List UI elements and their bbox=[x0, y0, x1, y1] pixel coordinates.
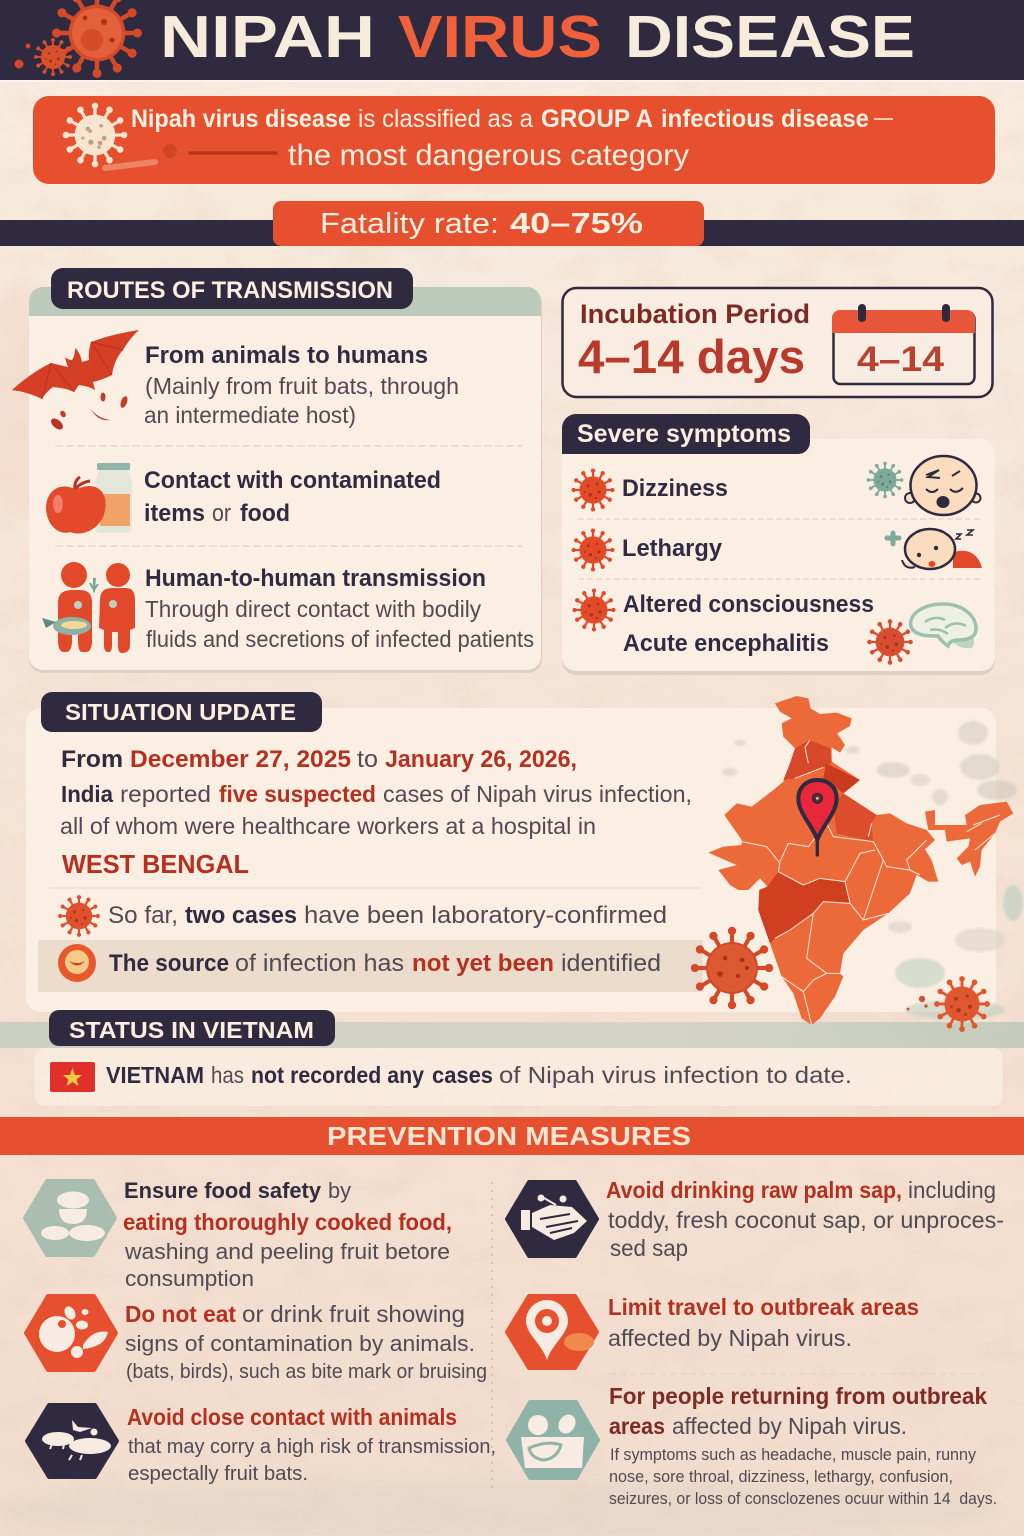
lab confirmed line: have been laboratory-confirmed bbox=[304, 902, 667, 929]
text: seizures, or loss of consclozenes ocuur within 14 days. bbox=[609, 1489, 997, 1508]
fatality band: 40–75% bbox=[510, 208, 643, 240]
panel: incubation period: Incubation Period bbox=[580, 299, 810, 329]
panel: situation update bbox=[26, 692, 1023, 1020]
header bar bbox=[0, 0, 1024, 82]
source unknown line bbox=[38, 940, 703, 992]
prevention: contaminated fruit bbox=[26, 1296, 487, 1383]
icon: small virus bbox=[14, 38, 72, 76]
situation text: all of whom were healthcare workers at a hospital in bbox=[60, 813, 596, 839]
text bbox=[606, 1177, 1004, 1261]
icon: sleeping face bbox=[887, 529, 982, 569]
banner text: the most dangerous category bbox=[288, 139, 689, 172]
text: For people returning from outbreak bbox=[609, 1383, 987, 1409]
prevention: returning travellers bbox=[508, 1383, 997, 1508]
text: (bats, birds), such as bite mark or bruising bbox=[126, 1361, 487, 1383]
text: consumption bbox=[125, 1266, 254, 1291]
icon: hexagon people bbox=[508, 1402, 598, 1478]
banner text bbox=[131, 105, 893, 172]
panel: routes of transmission bbox=[12, 268, 542, 673]
text: Avoid drinking raw palm sap, bbox=[606, 1177, 902, 1203]
Vietnam text: not recorded any bbox=[251, 1062, 424, 1088]
heading: ROUTES OF TRANSMISSION bbox=[67, 277, 393, 304]
prevention heading band: PREVENTION MEASURES bbox=[327, 1121, 691, 1151]
text: from animals: From animals to humans bbox=[145, 342, 428, 369]
icon: apple and jar bbox=[46, 463, 132, 533]
decorative smear bbox=[105, 144, 276, 168]
icon: dizzy face bbox=[867, 456, 980, 515]
text: sed sap bbox=[610, 1235, 688, 1261]
situation text: cases of Nipah virus infection, bbox=[383, 781, 692, 807]
banner text: GROUP A bbox=[541, 105, 653, 133]
map: India bbox=[708, 696, 1013, 1025]
situation text: December 27, 2025 bbox=[130, 746, 351, 773]
icon: hexagon animals bbox=[27, 1405, 117, 1477]
prevention heading band bbox=[0, 1117, 1024, 1155]
watercolor blotches bbox=[722, 721, 1023, 1020]
text: affected by Nipah virus. bbox=[608, 1325, 852, 1351]
text: human to human: fluids and secretions of infected patients bbox=[146, 626, 534, 652]
text: eating thoroughly cooked food, bbox=[123, 1209, 452, 1235]
prevention: palm sap bbox=[507, 1177, 1004, 1261]
text bbox=[127, 1404, 496, 1485]
text: signs of contamination by animals. bbox=[125, 1331, 475, 1356]
panel: incubation period: 4–14 days bbox=[578, 330, 805, 383]
text: areas bbox=[609, 1413, 665, 1439]
prevention: animals bbox=[27, 1404, 496, 1485]
text: contact: items bbox=[144, 500, 205, 527]
text: Limit travel to outbreak areas bbox=[608, 1294, 919, 1320]
Vietnam text bbox=[106, 1062, 852, 1088]
title bbox=[160, 4, 915, 70]
icon: hexagon chef bbox=[25, 1181, 115, 1255]
text bbox=[123, 1178, 452, 1291]
icon: Vietnam flag bbox=[50, 1062, 95, 1092]
banner text: infectious disease bbox=[661, 105, 869, 133]
text: contact bbox=[144, 467, 441, 527]
symptom labels: Acute encephalitis bbox=[623, 630, 829, 657]
situation text: India bbox=[61, 781, 113, 807]
title: NIPAH bbox=[160, 4, 375, 70]
heading: SITUATION UPDATE bbox=[65, 699, 296, 725]
text bbox=[125, 1301, 487, 1383]
heading bbox=[49, 1010, 335, 1046]
fatality band bbox=[0, 201, 1024, 246]
text: human to human: Through direct contact with bodily bbox=[145, 596, 481, 622]
text: from animals: an intermediate host) bbox=[144, 402, 356, 428]
text: Avoid close contact with animals bbox=[127, 1404, 457, 1430]
icon: calendar: 4–14 bbox=[857, 340, 945, 379]
symptom labels bbox=[622, 475, 874, 657]
text: human to human: Human-to-human transmission bbox=[145, 565, 486, 592]
source unknown line: identified bbox=[561, 950, 661, 977]
title: DISEASE bbox=[625, 4, 915, 70]
heading: Severe symptoms bbox=[577, 420, 791, 448]
text: contact: food bbox=[240, 500, 290, 527]
text bbox=[609, 1383, 997, 1508]
icon: calendar bbox=[832, 304, 975, 384]
text: toddy, fresh coconut sap, or unproces- bbox=[608, 1207, 1004, 1233]
icon: bat bbox=[12, 330, 139, 432]
icon: large virus bbox=[52, 0, 142, 78]
northeast states bbox=[925, 802, 1013, 877]
banner: classification bbox=[33, 96, 995, 184]
symptom labels: Lethargy bbox=[622, 535, 723, 562]
text: Ensure food safety bbox=[124, 1178, 322, 1203]
icon: location pin bbox=[798, 780, 837, 855]
icon: hexagon hands bbox=[507, 1182, 597, 1256]
source unknown line: of infection has bbox=[235, 950, 404, 977]
icon: large virus near map bbox=[691, 927, 773, 1009]
text: affected by Nipah virus. bbox=[672, 1413, 907, 1439]
heading bbox=[41, 692, 322, 732]
Vietnam text: of Nipah virus infection to date. bbox=[499, 1062, 852, 1088]
icon: two people bbox=[42, 562, 135, 653]
banner text: is classified as a bbox=[358, 105, 533, 133]
icon: virus bullets bbox=[571, 468, 616, 632]
text: contact: Contact with contaminated bbox=[144, 467, 441, 494]
text: Do not eat bbox=[125, 1301, 236, 1327]
prevention: limit travel bbox=[507, 1294, 919, 1368]
source unknown line: The source bbox=[109, 950, 229, 977]
text: If symptoms such as headache, muscle pain, runny bbox=[610, 1445, 976, 1464]
situation text: five suspected bbox=[219, 781, 376, 807]
band: status strip bbox=[0, 1022, 1024, 1048]
text: nose, sore throal, dizziness, lethargy, confusion, bbox=[609, 1467, 953, 1486]
text: human to human bbox=[145, 565, 534, 652]
icon: brain and virus bbox=[867, 604, 976, 665]
Vietnam text: has bbox=[211, 1062, 244, 1088]
heading bbox=[51, 268, 413, 309]
situation text: January 26, 2026, bbox=[385, 746, 577, 773]
text bbox=[608, 1294, 919, 1351]
banner text: Nipah virus disease bbox=[131, 105, 351, 133]
heading bbox=[562, 414, 810, 454]
icon: small virus near map bbox=[907, 976, 990, 1032]
source unknown line: not yet been bbox=[412, 950, 554, 977]
panel: status in Vietnam bbox=[35, 1010, 1003, 1106]
panel: incubation period bbox=[562, 288, 992, 397]
situation text: From bbox=[61, 746, 123, 773]
text: espectally fruit bats. bbox=[128, 1463, 308, 1485]
text: including bbox=[908, 1177, 996, 1203]
prevention: food safety bbox=[25, 1178, 452, 1291]
text: by bbox=[328, 1178, 351, 1203]
fatality band: Fatality rate: bbox=[320, 208, 499, 240]
text: or drink fruit showing bbox=[242, 1301, 465, 1327]
icon: cream virus bbox=[63, 103, 127, 167]
title: VIRUS bbox=[398, 4, 602, 70]
text: that may corry a high risk of transmission, bbox=[128, 1436, 496, 1458]
text: from animals: (Mainly from fruit bats, through bbox=[145, 373, 459, 399]
Vietnam text: VIETNAM bbox=[106, 1062, 204, 1088]
panel: severe symptoms bbox=[562, 414, 995, 675]
situation text: to bbox=[357, 746, 378, 773]
situation text bbox=[60, 746, 692, 879]
lab confirmed line: So far, bbox=[108, 902, 178, 929]
state borders bbox=[742, 740, 1000, 1025]
situation text: WEST BENGAL bbox=[62, 849, 249, 879]
icon: hexagon pin bbox=[507, 1296, 597, 1368]
heading: STATUS IN VIETNAM bbox=[69, 1017, 314, 1043]
symptom labels: Altered consciousness bbox=[623, 591, 874, 618]
situation text: reported bbox=[120, 781, 211, 807]
symptom labels: Dizziness bbox=[622, 475, 728, 502]
lab confirmed line: two cases bbox=[185, 902, 297, 929]
darker states bbox=[783, 740, 832, 780]
text: from animals bbox=[144, 342, 459, 428]
text: washing and peeling fruit betore bbox=[124, 1239, 450, 1264]
icon: hexagon fruit bbox=[26, 1296, 116, 1370]
text: contact: or bbox=[212, 500, 231, 527]
Vietnam text: cases bbox=[432, 1062, 493, 1088]
lab confirmed line bbox=[58, 895, 667, 937]
